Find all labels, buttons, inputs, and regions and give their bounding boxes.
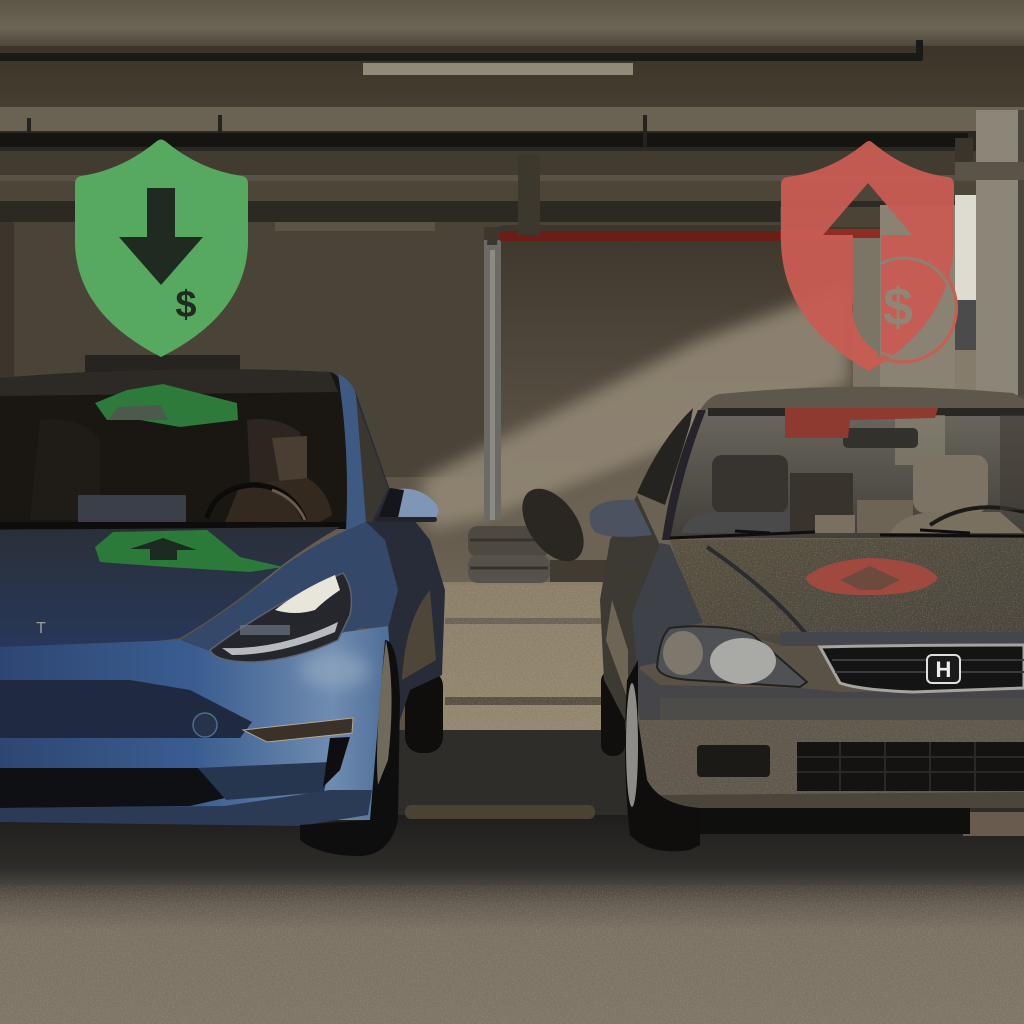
ceiling lights (363, 63, 633, 75)
wall base (550, 560, 610, 584)
blue Tesla car (0, 369, 445, 856)
near wheel (300, 640, 400, 856)
side window (355, 395, 388, 522)
dark plaque on left wall (85, 355, 240, 375)
far wheel (601, 670, 625, 756)
side mirror (378, 489, 439, 518)
upper grille (820, 645, 1024, 692)
vertical pipe and red pipe (484, 240, 501, 520)
wipers (670, 530, 1024, 538)
headlight (657, 626, 807, 687)
seats (247, 419, 307, 482)
Honda badge (927, 655, 960, 683)
fog light strip (243, 718, 353, 742)
roof (700, 387, 1024, 412)
icon: green shield with down arrow and dollar sign: $ (175, 284, 197, 326)
bumper highlight (300, 652, 370, 688)
ceiling slab (0, 0, 1024, 46)
icon: green shield with down arrow and dollar sign (75, 140, 248, 357)
green reflection on hood (95, 530, 283, 572)
hood (0, 527, 340, 647)
seats (712, 455, 788, 513)
stacked tires (468, 478, 596, 583)
floor (430, 582, 630, 732)
red reflection on windshield (785, 408, 938, 438)
icon: red shield with up arrow and dollar sign: $ (883, 277, 913, 337)
dashboard screen (78, 495, 186, 522)
headlight (210, 573, 351, 662)
roof and windshield (0, 369, 348, 530)
side window and frame (637, 408, 693, 505)
windshield and hood shield reflections (95, 384, 938, 595)
A pillar (662, 410, 706, 540)
icon: red shield with up arrow and dollar sign (781, 141, 957, 371)
front fender (180, 522, 398, 665)
logo: Tesla T: T (36, 620, 46, 637)
car side (600, 495, 660, 730)
hood shadow crease (707, 547, 807, 635)
hood (670, 538, 1024, 645)
rear-view mirror (843, 428, 918, 448)
upper bumper (637, 668, 1024, 720)
gray Honda car (590, 387, 1024, 851)
steering wheel (207, 485, 305, 520)
near wheel (625, 660, 700, 851)
ceiling pipes (0, 53, 922, 61)
lower bumper (638, 720, 1024, 808)
contact shadow under gray car (700, 808, 970, 834)
floor texture (0, 885, 1024, 1024)
oil patch (405, 805, 595, 819)
A pillar (338, 374, 366, 530)
lower grille (0, 768, 225, 808)
upper bumper band (0, 626, 391, 820)
side mirror (590, 500, 652, 537)
car side (355, 390, 445, 735)
gray Honda car: H (936, 657, 951, 682)
green reflection on windshield (95, 384, 238, 427)
sunlit band on wall (420, 285, 850, 530)
concrete pillars and window (853, 238, 880, 390)
red reflection on hood (805, 558, 938, 595)
far wheel (405, 670, 443, 753)
windshield (670, 408, 1024, 538)
fender (632, 543, 703, 667)
dark bumper recess (0, 680, 252, 738)
